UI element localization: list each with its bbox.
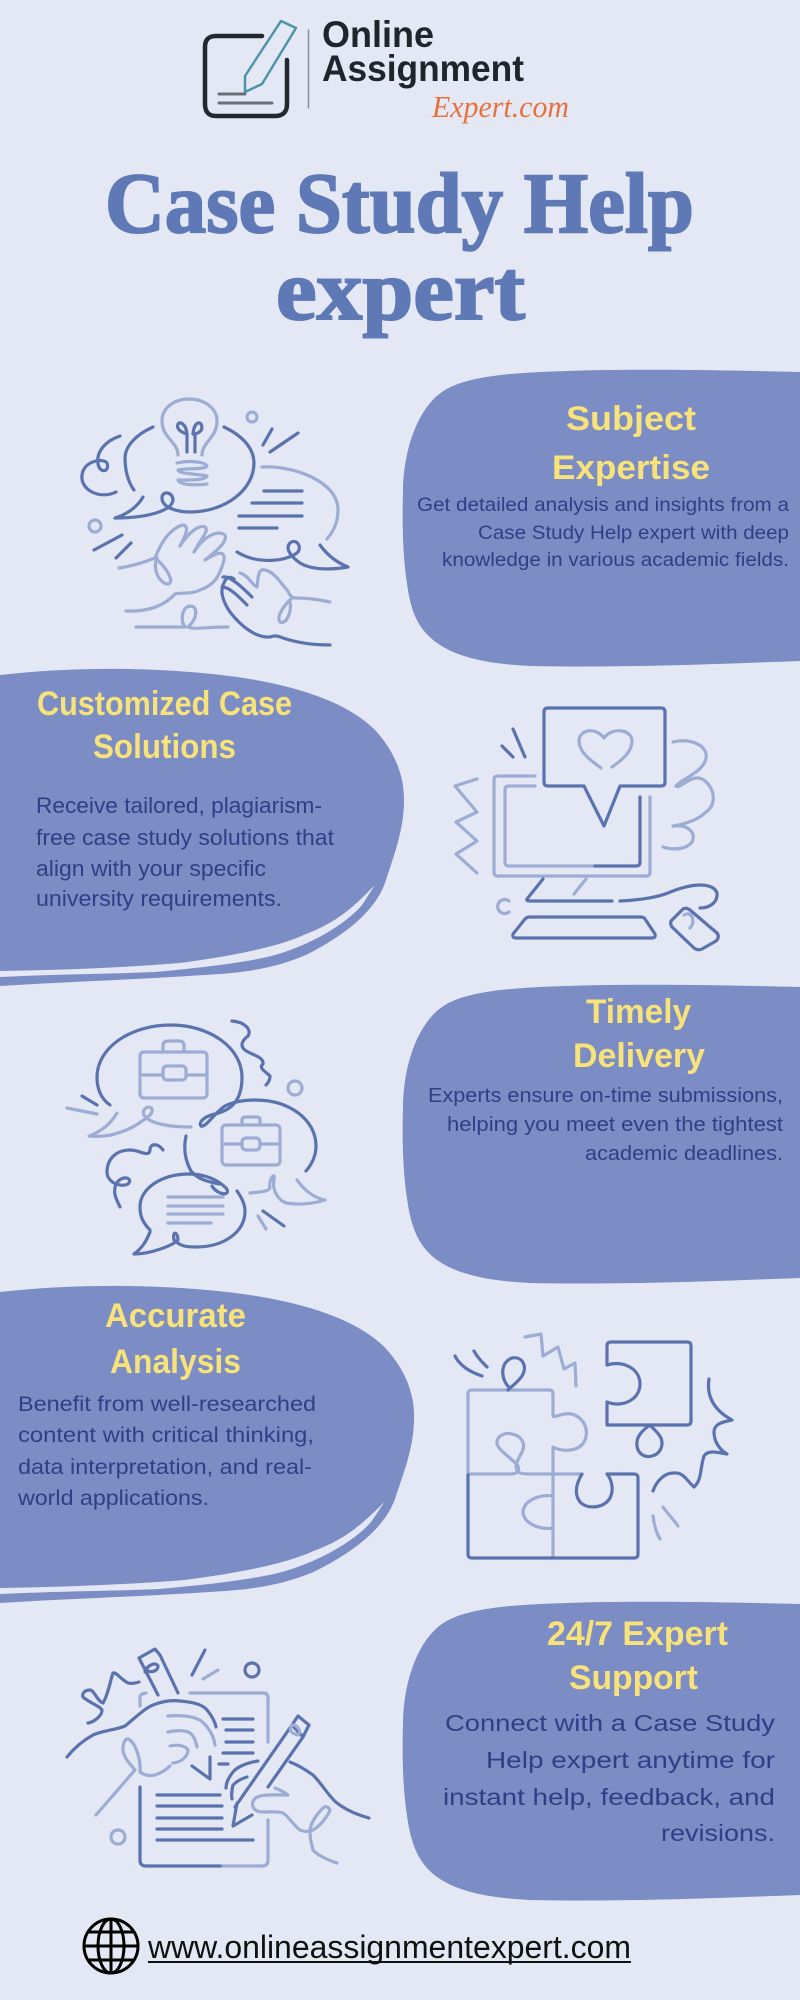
body text: accurate analysis: content with critical thinking, <box>18 1423 314 1447</box>
heading: 24/7 Expert <box>547 1615 728 1653</box>
heading <box>37 685 292 766</box>
heading: Delivery <box>573 1037 705 1075</box>
body text: Experts ensure on-time submissions, <box>428 1084 783 1107</box>
icon: light bulb, speech bubbles and hands <box>82 399 348 645</box>
body text: accurate analysis: data interpretation, and real- <box>18 1455 312 1479</box>
icon: notepad and pencil <box>205 21 308 116</box>
title: expert <box>276 242 525 338</box>
logo text: Assignment <box>322 48 524 89</box>
panel: subject expertise <box>403 370 800 667</box>
heading: Timely <box>586 993 691 1031</box>
icon: puzzle pieces <box>455 1334 732 1558</box>
heading: Expertise <box>552 449 710 487</box>
body text: revisions. <box>661 1820 775 1846</box>
body text: align with your specific <box>36 856 266 881</box>
title: Case Study Help <box>105 155 694 251</box>
logo text: Expert.com <box>431 89 569 124</box>
heading: accurate analysis: Analysis <box>110 1343 241 1381</box>
heading: Subject <box>566 400 696 438</box>
icon: computer with heart speech bubble <box>455 708 718 950</box>
panel: timely delivery <box>403 985 800 1284</box>
heading: accurate analysis: Accurate <box>105 1297 246 1335</box>
website url: www.onlineassignmentexpert.com <box>147 1929 631 1965</box>
body text: accurate analysis <box>17 1392 316 1510</box>
heading: accurate analysis <box>105 1297 246 1381</box>
title <box>105 155 694 338</box>
swoosh highlight <box>0 885 375 977</box>
body text: Connect with a Case Study <box>445 1710 775 1736</box>
body text <box>417 494 789 571</box>
logo text: Online <box>322 14 434 55</box>
body text <box>443 1710 775 1846</box>
icon: speech bubbles with briefcases <box>67 1021 325 1254</box>
heading <box>552 400 710 487</box>
swoosh highlight <box>0 1502 384 1594</box>
heading <box>573 993 705 1075</box>
body text <box>36 793 334 911</box>
body text <box>428 1084 783 1165</box>
body text: Get detailed analysis and insights from a <box>417 494 789 516</box>
heading: Solutions <box>93 728 236 766</box>
logo <box>205 14 569 124</box>
logo text <box>322 14 569 124</box>
body text: accurate analysis: world applications. <box>17 1486 209 1510</box>
icon: globe <box>84 1919 138 1973</box>
panel: accurate analysis <box>0 1286 414 1603</box>
body text: free case study solutions that <box>36 825 334 850</box>
panel: customized case solutions <box>0 669 404 986</box>
icon: hands writing on documents <box>67 1649 369 1866</box>
body text: accurate analysis: Benefit from well-researched <box>18 1392 316 1416</box>
heading <box>547 1615 728 1697</box>
body text: university requirements. <box>36 886 282 911</box>
heading: Customized Case <box>37 685 292 723</box>
body text: Receive tailored, plagiarism- <box>36 793 322 818</box>
body text: knowledge in various academic fields. <box>442 549 789 571</box>
body text: instant help, feedback, and <box>443 1784 775 1810</box>
panel: 24/7 expert support <box>403 1602 800 1901</box>
body text: Case Study Help expert with deep <box>478 522 789 544</box>
body text: academic deadlines. <box>585 1142 783 1165</box>
heading: Support <box>569 1659 698 1697</box>
body text: Help expert anytime for <box>486 1747 775 1773</box>
body text: helping you meet even the tightest <box>447 1113 783 1136</box>
